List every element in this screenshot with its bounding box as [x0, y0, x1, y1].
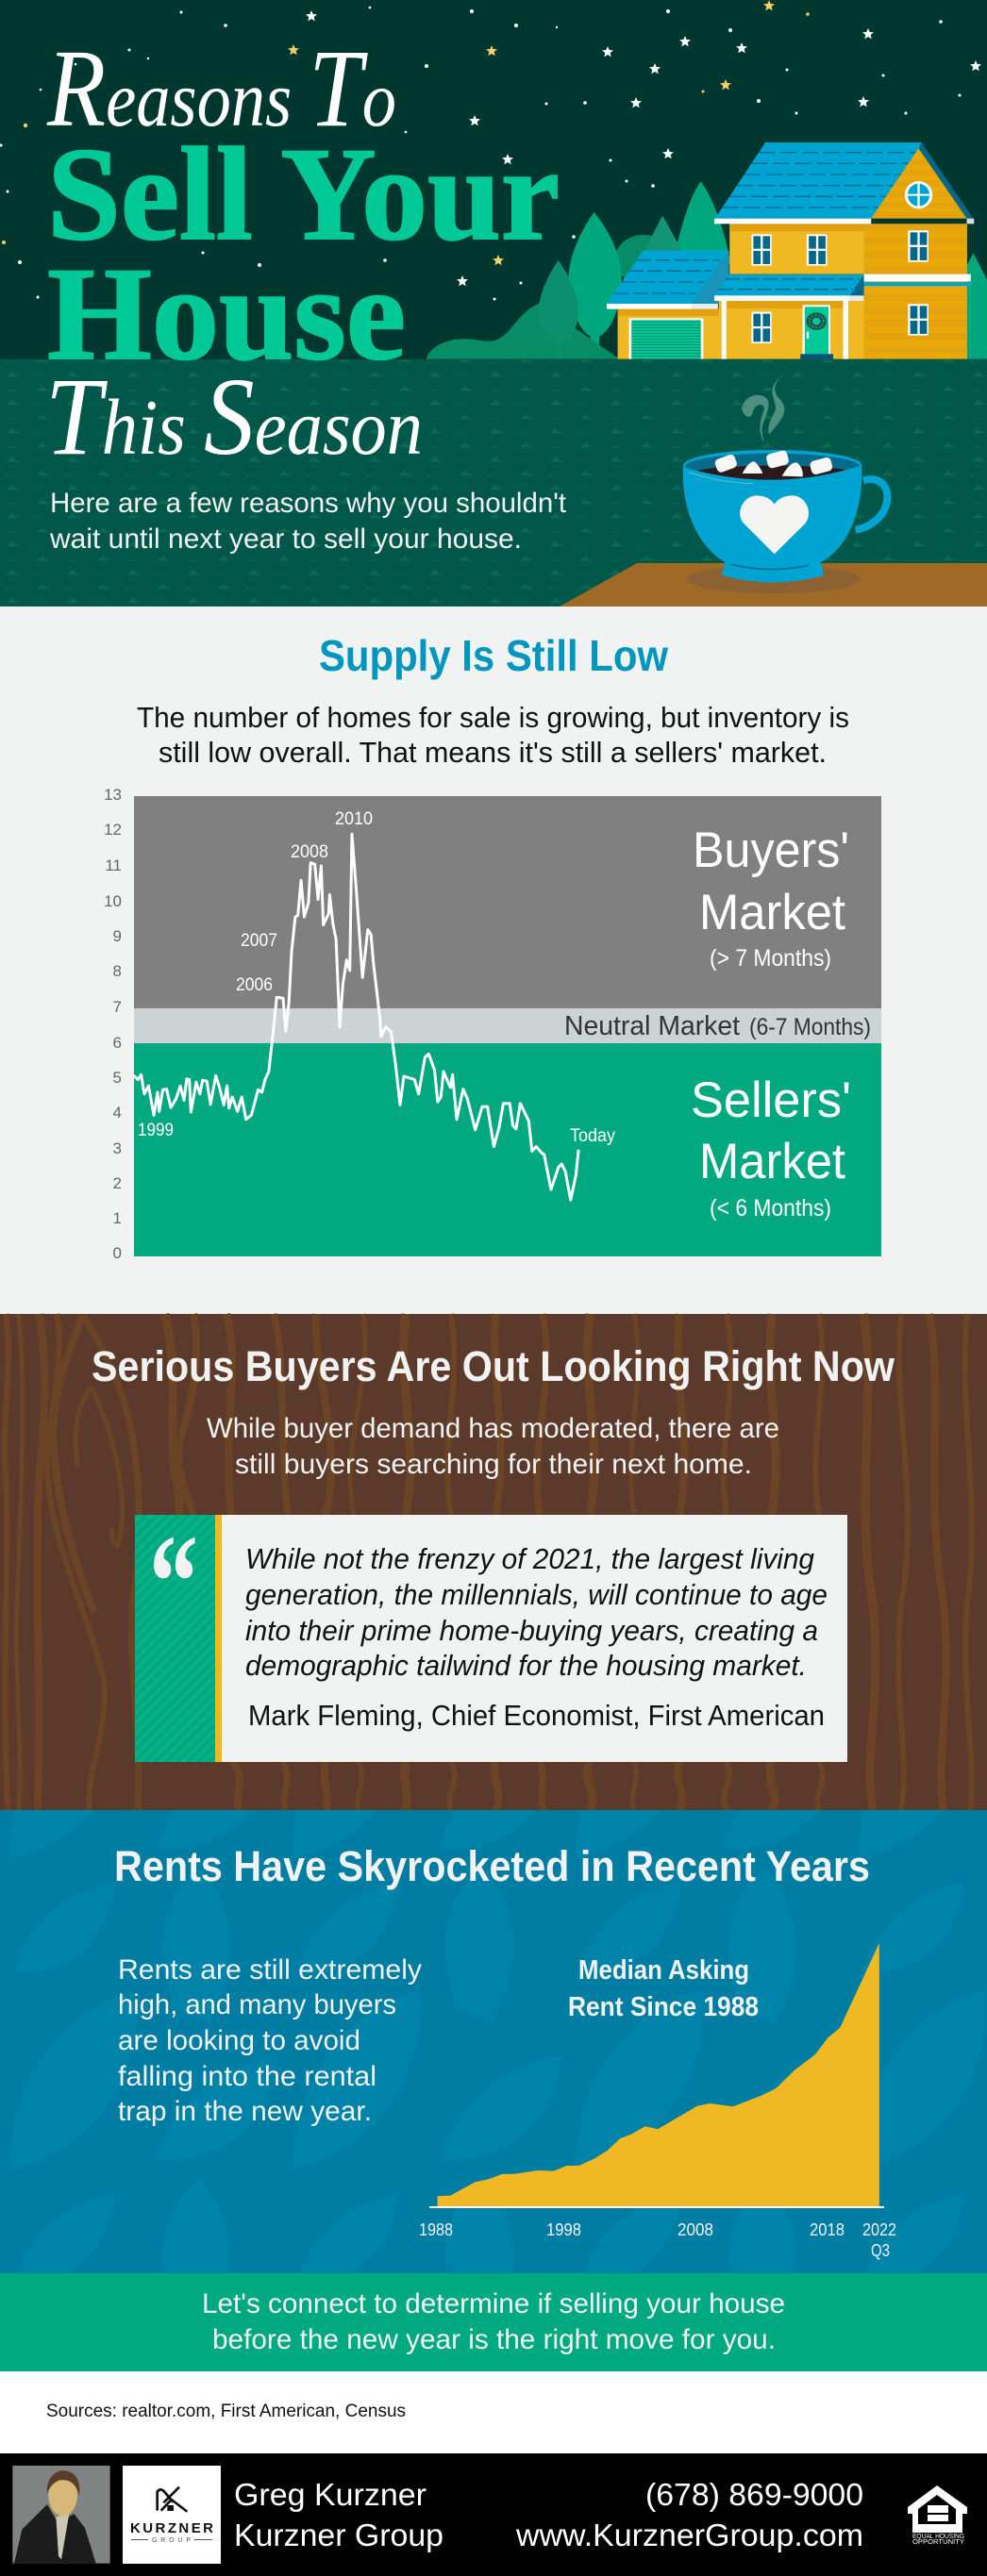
contact details: www.KurznerGroup.com — [515, 2518, 863, 2552]
y axis labels: 7 — [113, 998, 122, 1016]
call to action text: Let's connect to determine if selling your house — [202, 2288, 785, 2319]
table top — [560, 563, 987, 607]
call to action text — [202, 2288, 785, 2355]
garage — [607, 251, 728, 359]
door with wreath — [800, 305, 833, 359]
logo mark — [158, 2487, 187, 2512]
header intro text: Here are a few reasons why you shouldn't — [50, 488, 567, 519]
heading: Supply Is Still Low: Supply Is Still Low — [319, 631, 668, 680]
agent name: Kurzner Group — [234, 2518, 443, 2552]
axis line — [429, 2206, 884, 2208]
axis labels — [419, 2220, 896, 2260]
wood grain — [5, 1314, 972, 1810]
y axis labels: 10 — [104, 892, 122, 910]
supply description: The number of homes for sale is growing, but inventory is — [137, 701, 849, 734]
trees — [427, 181, 987, 359]
label: sellers market: Sellers' — [691, 1072, 851, 1128]
quote text: generation, the millennials, will continue to age — [245, 1578, 828, 1611]
label: buyers market — [693, 823, 849, 972]
chart title: Median Asking — [578, 1955, 749, 1986]
chart title: Rent Since 1988 — [568, 1992, 759, 2022]
quote text — [245, 1542, 828, 1682]
y axis labels — [104, 786, 122, 1262]
title: House: House — [47, 241, 406, 388]
label: buyers market: Buyers' — [693, 823, 849, 878]
quote text: While not the frenzy of 2021, the largest living — [245, 1542, 814, 1575]
year labels: 2008 — [291, 842, 328, 862]
label: neutral market: Neutral Market — [564, 1011, 740, 1041]
stars — [0, 0, 981, 300]
heart — [740, 495, 809, 554]
y axis labels: 2 — [113, 1174, 122, 1192]
icon: hot cocoa cup — [683, 374, 887, 593]
contact details — [515, 2477, 863, 2552]
y axis labels: 3 — [113, 1139, 122, 1157]
icon: quotation mark: “ — [149, 1507, 198, 1658]
panel: call to action — [0, 2273, 987, 2371]
agent name: Greg Kurzner — [234, 2477, 427, 2512]
panel: footer — [0, 2453, 987, 2576]
year labels: 1999 — [138, 1121, 174, 1140]
supply description — [137, 701, 849, 769]
quote text: demographic tailwind for the housing market. — [245, 1649, 807, 1682]
label: sellers market: Market — [699, 1134, 845, 1189]
icon: equal housing opportunity: EQUAL HOUSING — [912, 2534, 964, 2540]
label: buyers market: Market — [699, 885, 845, 940]
quote strip — [135, 1515, 215, 1762]
rents description: high, and many buyers — [118, 1989, 396, 2020]
chart: median asking rent — [419, 1943, 896, 2260]
chart: months of inventory — [104, 786, 881, 1262]
axis labels: 1988 — [419, 2220, 453, 2239]
y axis labels: 12 — [104, 821, 122, 839]
steam — [742, 374, 784, 442]
chart title — [568, 1955, 759, 2022]
rents description: falling into the rental — [118, 2061, 376, 2092]
quote card — [135, 1507, 847, 1762]
header intro text: wait until next year to sell your house. — [49, 524, 522, 555]
windows — [751, 230, 928, 343]
rents description: Rents are still extremely — [118, 1954, 422, 1986]
axis labels: Q3 — [871, 2241, 890, 2260]
sources text: Sources: realtor.com, First American, Census — [46, 2401, 406, 2421]
quote text: into their prime home-buying years, creating a — [245, 1614, 818, 1647]
illustration: house and trees — [427, 142, 987, 359]
y axis labels: 8 — [113, 962, 122, 980]
buyers market band — [134, 796, 881, 1009]
title: Sell Your: Sell Your — [47, 121, 560, 268]
buyers description — [207, 1413, 779, 1480]
label: neutral market — [564, 1011, 871, 1041]
header intro text — [49, 488, 567, 555]
y axis labels: 0 — [113, 1244, 122, 1262]
logo: Kurzner Group — [123, 2466, 221, 2564]
y axis labels: 6 — [113, 1034, 122, 1052]
y axis labels: 9 — [113, 927, 122, 945]
marshmallows — [713, 450, 833, 476]
year labels: 2010 — [335, 809, 373, 829]
y axis labels: 4 — [113, 1104, 122, 1122]
label: neutral market: (6-7 Months) — [749, 1014, 871, 1040]
title: This Season: This Season — [45, 355, 423, 478]
logo wordmark: KURZNER — [130, 2520, 213, 2536]
panel: header night sky — [0, 0, 987, 360]
main house — [714, 142, 974, 359]
agent name — [234, 2477, 443, 2552]
year labels — [138, 809, 615, 1146]
y axis labels: 11 — [105, 856, 122, 874]
y axis labels: 5 — [113, 1069, 122, 1087]
heading: rents: Rents Have Skyrocketed in Recent Years — [114, 1842, 870, 1890]
year labels: 2006 — [236, 975, 273, 995]
axis labels: 1998 — [546, 2220, 581, 2239]
axis labels: 2018 — [810, 2220, 845, 2239]
agent photo — [12, 2466, 110, 2564]
icon: equal housing opportunity — [908, 2485, 967, 2546]
rents description: trap in the new year. — [118, 2096, 372, 2127]
rents description — [118, 1954, 422, 2127]
buyers description: still buyers searching for their next home. — [235, 1449, 752, 1480]
neutral market band — [134, 1008, 881, 1044]
call to action text: before the new year is the right move for you. — [212, 2324, 776, 2355]
label: sellers market — [691, 1072, 851, 1222]
area — [438, 1943, 879, 2206]
label: sellers market: (< 6 Months) — [710, 1195, 831, 1222]
sellers market band — [134, 1043, 881, 1256]
label: buyers market: (> 7 Months) — [710, 945, 831, 972]
contact details: (678) 869-9000 — [645, 2477, 863, 2512]
panel: sources — [0, 2371, 987, 2453]
quote attribution: Mark Fleming, Chief Economist, First American — [248, 1699, 825, 1732]
panel: header lower band — [0, 359, 987, 607]
panel: rents section — [0, 1810, 987, 2274]
supply description: still low overall. That means it's still a sellers' market. — [159, 736, 827, 769]
rents description: are looking to avoid — [118, 2025, 360, 2056]
panel: serious buyers wood section — [0, 1314, 987, 1811]
axis labels: 2022 — [862, 2220, 896, 2239]
axis labels: 2008 — [678, 2220, 713, 2239]
heading: serious buyers: Serious Buyers Are Out Looking Right Now — [92, 1342, 895, 1390]
logo subtitle: GROUP — [152, 2537, 191, 2544]
inventory line — [134, 834, 578, 1200]
year labels: 2007 — [241, 931, 277, 951]
y axis labels: 1 — [113, 1209, 122, 1227]
title: Reasons To: Reasons To — [46, 26, 396, 150]
y axis labels: 13 — [104, 786, 122, 804]
panel: supply section — [0, 607, 987, 1314]
icon: equal housing opportunity: OPPORTUNITY — [912, 2539, 964, 2546]
year labels: Today — [570, 1126, 615, 1146]
buyers description: While buyer demand has moderated, there are — [207, 1413, 779, 1444]
